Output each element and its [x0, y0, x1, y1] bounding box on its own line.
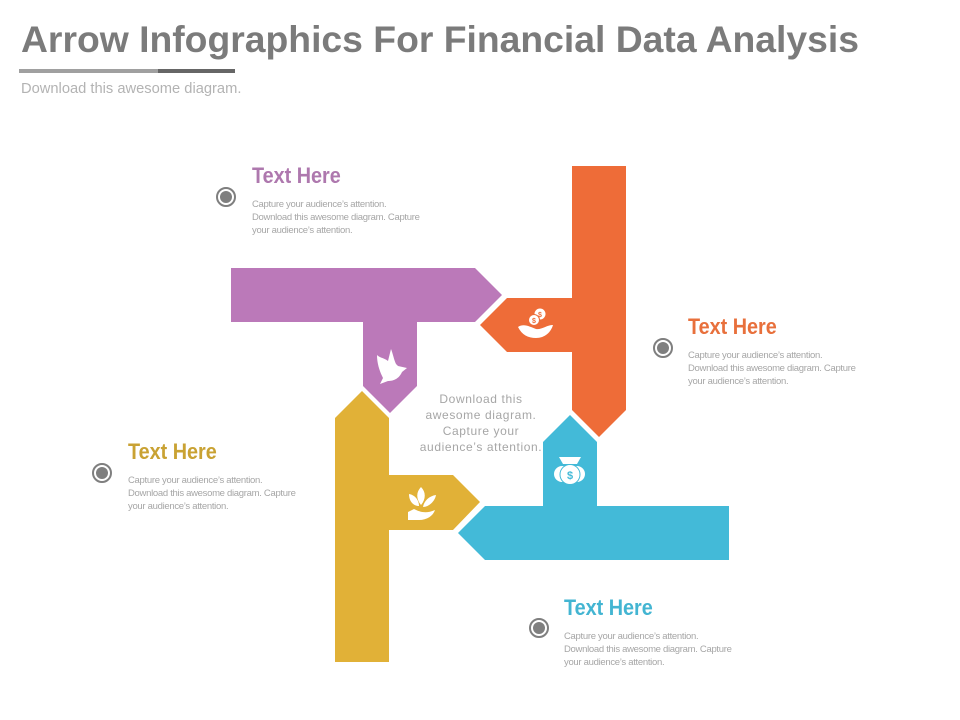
- text block: yellow: [128, 439, 296, 512]
- text block: orange: [688, 314, 856, 387]
- text block: yellow: your audience’s attention.: [128, 501, 228, 512]
- text block: blue: Text Here: [564, 595, 653, 620]
- orange arrow: [480, 166, 626, 437]
- text block: purple: Capture your audience’s attention.: [252, 199, 386, 210]
- text block: orange: Text Here: [688, 314, 777, 339]
- text block: orange: Download this awesome diagram. Capture: [688, 363, 856, 374]
- text block: blue: Download this awesome diagram. Capture: [564, 644, 732, 655]
- text block: blue: your audience’s attention.: [564, 657, 664, 668]
- text block: yellow: Download this awesome diagram. Capture: [128, 488, 296, 499]
- bullet: blue item: [530, 619, 548, 637]
- icon: money bags: [554, 457, 585, 484]
- text block: yellow: Capture your audience’s attention.: [128, 475, 262, 486]
- title underline: [19, 69, 235, 73]
- centre text: audience’s attention.: [420, 440, 542, 454]
- title: Arrow Infographics For Financial Data Analysis: [21, 18, 859, 60]
- centre text: Download this: [439, 392, 523, 406]
- text block: purple: your audience’s attention.: [252, 225, 352, 236]
- bullet: yellow item: [93, 464, 111, 482]
- purple arrow: [231, 268, 502, 413]
- icon detail: coin symbols: $: [538, 312, 542, 319]
- text block: purple: [252, 163, 420, 236]
- icon detail: coin symbols: [532, 312, 542, 325]
- text block: orange: Capture your audience’s attention.: [688, 350, 822, 361]
- text block: orange: your audience’s attention.: [688, 376, 788, 387]
- yellow arrow: [335, 391, 480, 662]
- text block: blue: [564, 595, 732, 668]
- text block: purple: Text Here: [252, 163, 341, 188]
- icon: hand with coins: [518, 308, 553, 338]
- text block: yellow: Text Here: [128, 439, 217, 464]
- text block: purple: Download this awesome diagram. Capture: [252, 212, 420, 223]
- centre text: awesome diagram.: [426, 408, 536, 422]
- icon: dove: [377, 349, 407, 384]
- centre text: Capture your: [443, 424, 519, 438]
- bullet: purple item: [217, 188, 235, 206]
- icon: hand with plant: [408, 487, 436, 520]
- blue arrow: [458, 415, 729, 560]
- centre text: [420, 392, 542, 454]
- bullet: orange item: [654, 339, 672, 357]
- text block: blue: Capture your audience’s attention.: [564, 631, 698, 642]
- subtitle: Download this awesome diagram.: [21, 81, 241, 97]
- icon detail: dollar sign: $: [567, 470, 573, 482]
- icon detail: coin symbols: $: [532, 318, 536, 325]
